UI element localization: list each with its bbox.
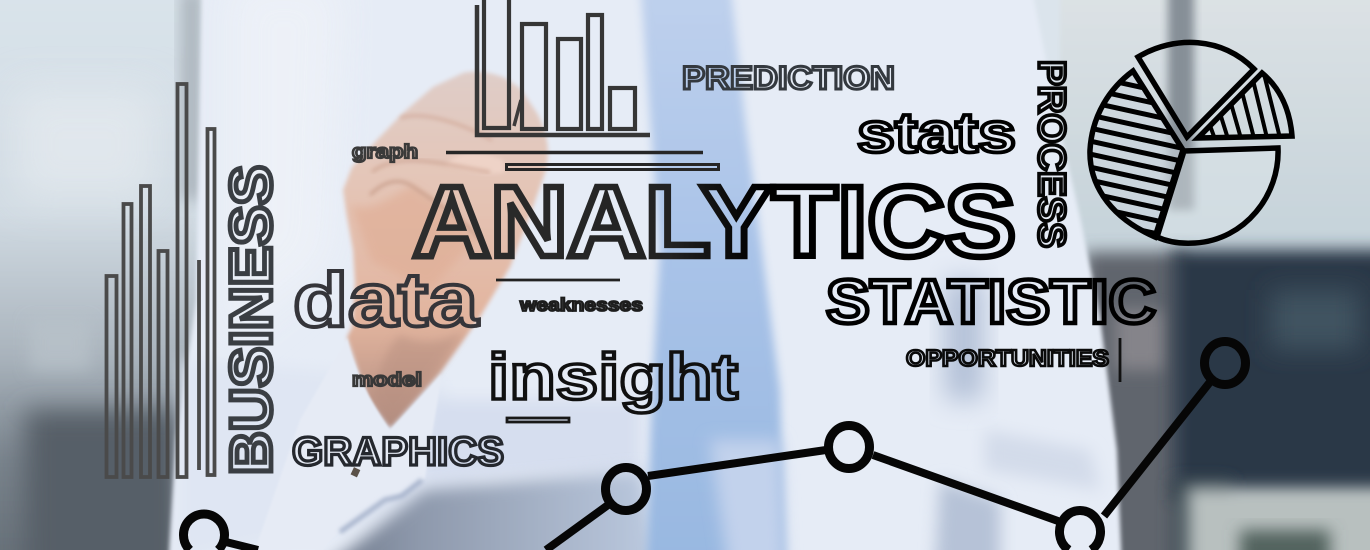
data point 2: [606, 468, 646, 510]
word: weaknesses: weaknesses: [519, 295, 643, 315]
rule above weaknesses: [496, 279, 620, 281]
word: graph: graph: [352, 142, 418, 163]
pie slice: striped left: [1085, 62, 1190, 241]
rules under top bar chart: [446, 152, 718, 170]
line chart: [184, 342, 1246, 550]
data point 1: [184, 514, 225, 550]
data point 3: [828, 426, 870, 468]
word: GRAPHICS: GRAPHICS: [292, 430, 504, 474]
word: STATISTIC: STATISTIC: [826, 268, 1156, 337]
data point 5: [1204, 342, 1246, 384]
shirt cuff: [255, 338, 442, 550]
word: data: data: [293, 258, 479, 343]
word: OPPORTUNITIES: OPPORTUNITIES: [906, 345, 1109, 371]
pie slice: plain top: [1138, 42, 1254, 137]
pie chart: [1085, 42, 1292, 243]
word: stats: stats: [857, 101, 1016, 165]
title: ANALYTICS: ANALYTICS: [413, 166, 1016, 278]
word: model: model: [352, 370, 422, 391]
rule under insight: [507, 418, 569, 422]
top bar chart: [477, 0, 650, 135]
word: PREDICTION: PREDICTION: [682, 60, 895, 96]
pie slice: striped right: [1198, 70, 1292, 142]
rule beside OPPORTUNITIES: [1119, 338, 1121, 382]
word: PROCESS: PROCESS: [1030, 60, 1072, 248]
hand holding marker: [343, 72, 548, 428]
pie slice: plain bottom: [1157, 148, 1278, 243]
word: BUSINESS: BUSINESS: [219, 165, 284, 475]
left bar chart: [106, 84, 214, 477]
word: insight: insight: [488, 340, 738, 413]
data point 4: [1059, 510, 1100, 550]
